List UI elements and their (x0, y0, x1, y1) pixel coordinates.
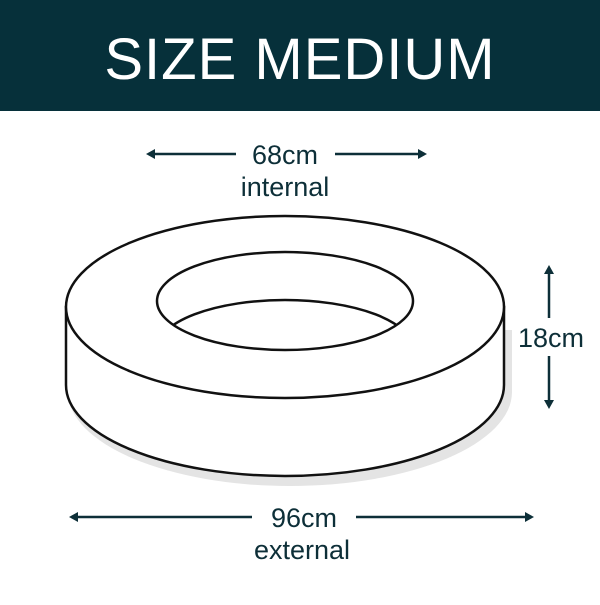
arrow: internal width (146, 149, 427, 159)
header banner (0, 0, 600, 111)
label: 68cm internal (241, 140, 329, 202)
label: 68cm internal: internal (241, 172, 329, 202)
label: 96cm external (254, 503, 350, 565)
arrow: external width (69, 512, 534, 522)
label: 96cm external: external (254, 535, 350, 565)
ring illustration (66, 216, 512, 486)
label: 18cm: 18cm (518, 323, 584, 353)
label: 68cm internal: 68cm (252, 140, 318, 170)
arrow: height (544, 265, 554, 409)
shadow (68, 330, 512, 486)
label: 96cm external: 96cm (271, 503, 337, 533)
title: SIZE MEDIUM (104, 27, 496, 92)
